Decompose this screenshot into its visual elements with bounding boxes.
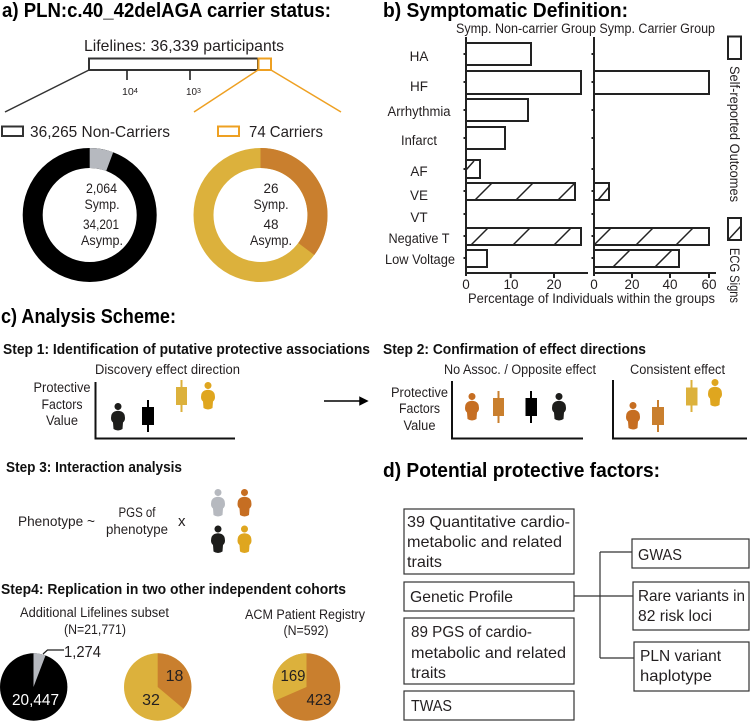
chart: discovery effect direction: Discovery effect direction <box>95 362 240 377</box>
box: quantitative traits: 39 Quantitative cardio- <box>407 514 570 531</box>
step 4 heading: Step4: Replication in two other independent cohorts <box>1 582 346 598</box>
bar chart: carrier group <box>592 37 716 278</box>
pie chart: Lifelines carriers <box>124 653 191 721</box>
axis tick labels: 60 <box>701 277 717 292</box>
donut chart: carriers: 26 <box>263 181 279 196</box>
chart: discovery effect direction <box>34 362 240 438</box>
scale bar: 10 <box>122 86 134 98</box>
donut chart: non-carriers: 2,064 <box>86 181 117 196</box>
panel: b) symptomatic definition <box>383 0 742 306</box>
legend: carriers: 74 Carriers <box>249 124 323 141</box>
box: rare variants: 82 risk loci <box>638 608 712 625</box>
pie chart: Lifelines non-carriers <box>0 644 101 721</box>
row labels: HA <box>410 49 428 64</box>
box: TWAS: TWAS <box>411 698 452 715</box>
cohort label: ACM registry <box>245 607 365 638</box>
box: PLN variant haplotype: haplotype <box>640 668 712 685</box>
donut chart: non-carriers: 34,201 <box>83 217 119 232</box>
pie chart: ACM registry: 169 <box>280 668 306 685</box>
box: quantitative traits <box>404 509 574 574</box>
row labels: Negative T <box>388 231 450 246</box>
box: PGS traits <box>404 618 574 684</box>
donut chart: carriers: Symp. <box>254 197 288 212</box>
formula: interaction model: Phenotype ~ <box>18 514 95 529</box>
row labels: VT <box>410 210 428 225</box>
chart: consistent effect: Consistent effect <box>630 362 725 377</box>
panel: d) potential protective factors <box>383 460 749 720</box>
row labels: Infarct <box>401 133 437 148</box>
donut chart: carriers <box>204 148 328 272</box>
row labels: AF <box>410 164 428 179</box>
cohort label: Lifelines subset <box>20 605 169 637</box>
donut chart: carriers: Asymp. <box>250 233 292 248</box>
pie chart: ACM registry: 423 <box>306 692 332 709</box>
column titles: Symp. Non-carrier Group Symp. Carrier Group <box>456 21 715 36</box>
box: quantitative traits: metabolic and related <box>407 534 562 551</box>
cohort label: Lifelines subset: (N=21,771) <box>64 622 126 637</box>
heading: panel a: a) PLN:c.40_42delAGA carrier status: <box>2 0 331 22</box>
x axis title: Percentage of Individuals within the groups <box>468 291 715 306</box>
scale bar: 3 <box>197 86 201 95</box>
step 2 heading: Step 2: Confirmation of effect directions <box>383 342 646 358</box>
legend: ECG signs <box>727 218 742 303</box>
donut chart: non-carriers: Symp. <box>84 197 120 212</box>
box: PGS traits: 89 PGS of cardio- <box>411 624 532 641</box>
scale bar: 4 <box>134 86 138 95</box>
step 3 heading: Step 3: Interaction analysis <box>6 460 182 476</box>
formula: interaction model: x <box>178 513 186 530</box>
cohort label: ACM registry: (N=592) <box>284 623 328 638</box>
chart: no association or opposite effect: Factors <box>399 401 440 416</box>
box: rare variants: Rare variants in <box>638 588 745 605</box>
heading: panel c: c) Analysis Scheme: <box>1 306 176 328</box>
chart: consistent effect <box>613 362 747 438</box>
axis tick labels: 0 <box>462 277 470 292</box>
legend: self-reported outcomes: Self-reported Outcomes <box>727 66 742 202</box>
chart: no association or opposite effect: No Assoc. / Opposite effect <box>444 362 596 377</box>
connector lines <box>574 552 634 658</box>
box: quantitative traits: traits <box>407 554 442 571</box>
axis tick labels: 20 <box>546 277 562 292</box>
step 1 heading: Step 1: Identification of putative protective associations <box>3 342 370 358</box>
axis tick labels: 20 <box>624 277 640 292</box>
row labels: Arrhythmia <box>388 104 451 119</box>
row labels: Low Voltage <box>385 252 455 267</box>
axis tick labels: 10 <box>503 277 519 292</box>
formula: interaction model: phenotype <box>106 522 168 537</box>
cohort label: ACM registry: ACM Patient Registry <box>245 607 365 622</box>
chart: discovery effect direction: Value <box>46 413 78 428</box>
legend: carriers <box>218 124 323 141</box>
panel: a) carrier status <box>2 0 341 272</box>
box: PLN variant haplotype <box>634 642 749 691</box>
box: genetic profile: Genetic Profile <box>410 589 513 606</box>
arrow: step 1 to step 2 <box>324 398 367 404</box>
chart: discovery effect direction: Factors <box>42 397 83 412</box>
pie chart: Lifelines carriers: 18 <box>166 668 184 685</box>
axis tick labels: 40 <box>662 277 678 292</box>
pie chart: Lifelines carriers: 32 <box>142 692 160 709</box>
row labels: VE <box>410 188 428 203</box>
box: GWAS <box>632 539 749 568</box>
box: PGS traits: traits <box>411 665 446 682</box>
box: TWAS <box>404 691 574 720</box>
chart: discovery effect direction: Protective <box>34 380 90 395</box>
cohort label: Lifelines subset: Additional Lifelines subset <box>20 605 169 620</box>
box: PLN variant haplotype: PLN variant <box>640 648 722 665</box>
formula: interaction model: PGS of <box>118 505 156 520</box>
formula: interaction model <box>18 489 252 553</box>
chart: no association or opposite effect: Value <box>404 418 436 433</box>
pie chart: Lifelines non-carriers: 20,447 <box>12 692 59 709</box>
panel: c) analysis scheme <box>0 306 747 721</box>
box: rare variants <box>633 582 749 630</box>
axis tick labels: 0 <box>590 277 598 292</box>
legend: non-carriers: 36,265 Non-Carriers <box>30 124 170 141</box>
pie chart: Lifelines non-carriers: 1,274 <box>64 644 101 661</box>
row labels: HF <box>410 79 428 94</box>
donut chart: carriers: 48 <box>263 217 279 232</box>
donut chart: non-carriers <box>33 148 147 272</box>
bar chart: non-carrier group <box>464 37 588 278</box>
legend: ECG signs: ECG Signs <box>727 248 742 303</box>
text: Lifelines participants: Lifelines: 36,339 participants <box>84 38 284 55</box>
chart: no association or opposite effect <box>391 362 596 438</box>
box: GWAS: GWAS <box>638 547 682 564</box>
scale bar: 10 <box>186 86 198 98</box>
donut chart: non-carriers: Asymp. <box>81 233 123 248</box>
scale bar <box>5 58 341 112</box>
axis tick labels <box>462 277 717 292</box>
chart: no association or opposite effect: Protective <box>391 385 448 400</box>
heading: panel b: b) Symptomatic Definition: <box>383 0 628 22</box>
row labels <box>385 49 455 267</box>
heading: panel d: d) Potential protective factors: <box>383 460 660 482</box>
box: PGS traits: metabolic and related <box>411 645 566 662</box>
pie chart: ACM registry <box>273 653 340 721</box>
box: genetic profile <box>404 582 574 611</box>
